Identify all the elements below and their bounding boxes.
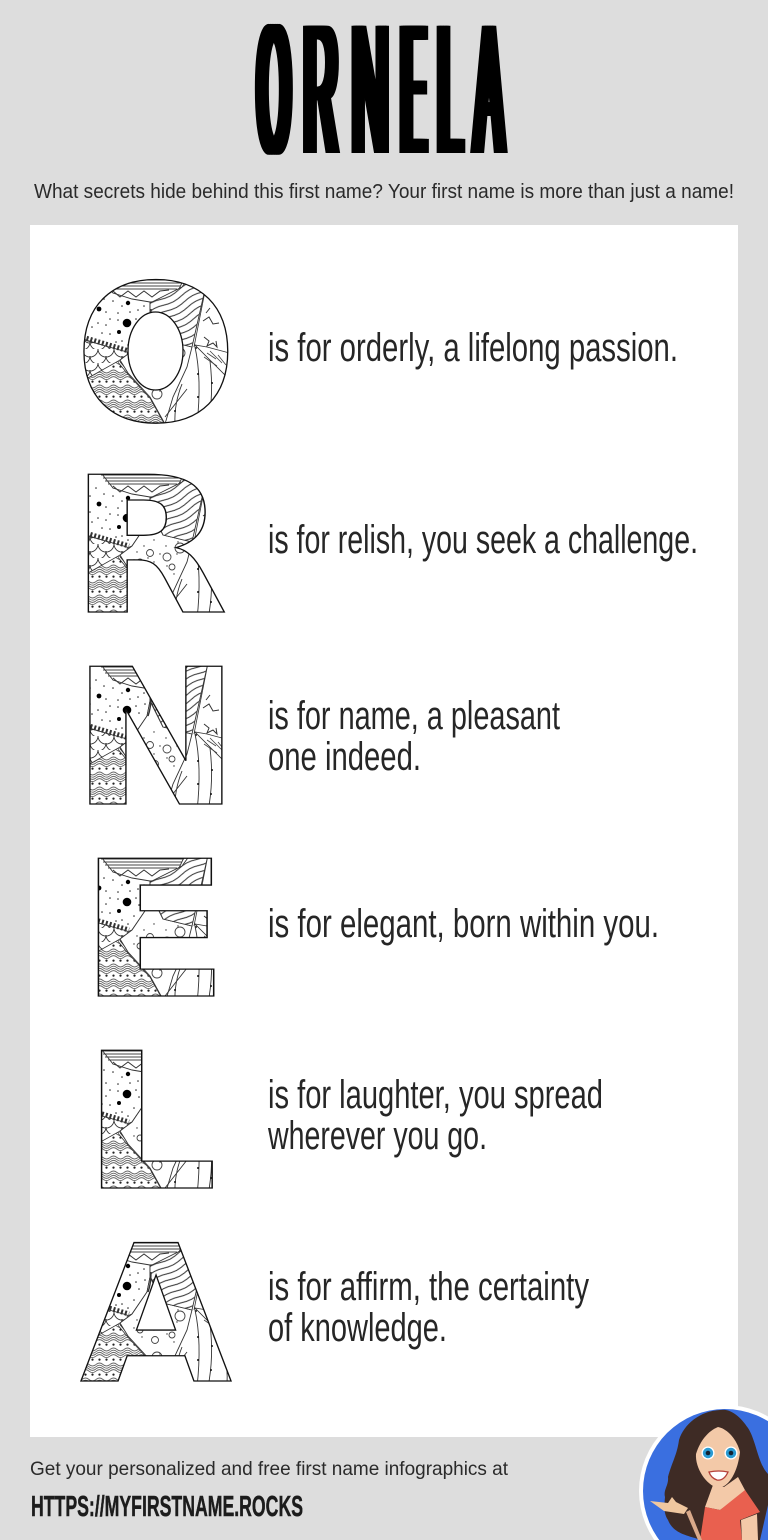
row: letter N <box>71 629 560 849</box>
text: A meaning: is for affirm, the certainty <box>268 1265 589 1309</box>
text: N meaning <box>268 694 560 779</box>
row: letter E <box>78 821 659 1041</box>
icon: avatar woman in blue circle <box>639 1405 768 1540</box>
icon: patterned letter N: N <box>71 629 240 849</box>
row: letter O <box>74 244 678 466</box>
text: A meaning <box>268 1265 589 1350</box>
footer text: Get your personalized and free first name infographics at <box>30 1458 509 1480</box>
text: L meaning: wherever you go. <box>267 1114 487 1158</box>
panel: white letter list <box>30 225 738 1437</box>
row: letter R <box>69 437 698 657</box>
row: letter L <box>82 1013 603 1233</box>
title: ORNELA <box>254 0 508 193</box>
icon: patterned letter O: O <box>74 244 237 466</box>
text: L meaning: is for laughter, you spread <box>268 1073 603 1117</box>
text: A meaning: of knowledge. <box>268 1306 447 1350</box>
subtitle: What secrets hide behind this first name? Your first name is more than just a name! <box>34 181 734 203</box>
text: N meaning: is for name, a pleasant <box>268 694 560 738</box>
row: letter A <box>80 1205 589 1426</box>
text: N meaning: one indeed. <box>268 735 421 779</box>
footer url: HTTPS://MYFIRSTNAME.ROCKS <box>31 1491 303 1523</box>
text: L meaning <box>267 1073 603 1158</box>
icon: patterned letter R: R <box>69 437 228 657</box>
icon: patterned letter E: E <box>78 821 230 1041</box>
icon: patterned letter A: A <box>80 1205 232 1426</box>
icon: patterned letter L: L <box>82 1013 218 1233</box>
